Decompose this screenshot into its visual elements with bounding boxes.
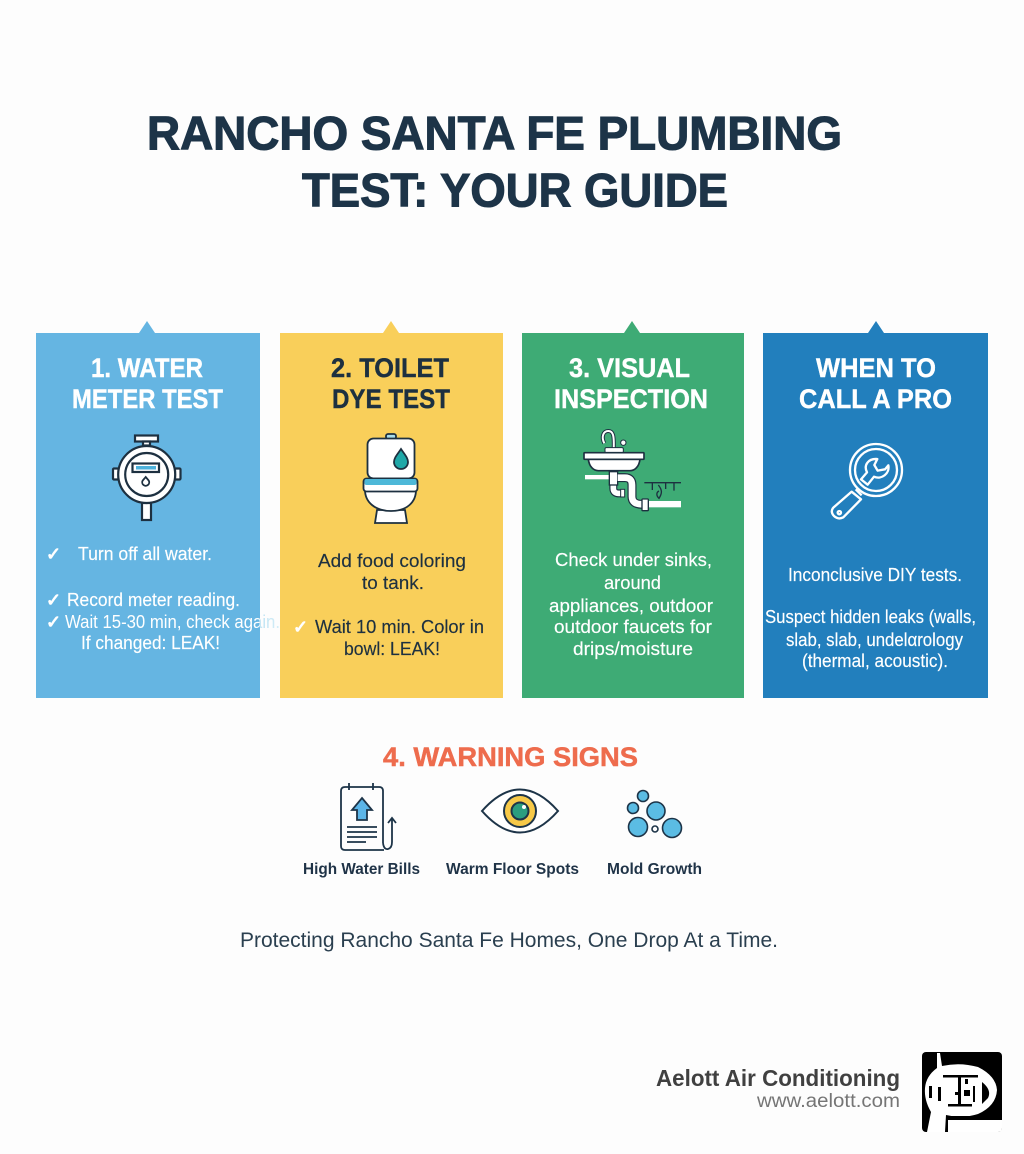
text: dye test steps: Add food coloring	[318, 551, 466, 571]
company name and website: Aelott Air Conditioning	[656, 1065, 900, 1091]
warning sign: warm floor spots	[446, 790, 579, 878]
text: meter steps: ✓	[46, 590, 61, 611]
text: when to call reasons: Inconclusive DIY tests.	[788, 565, 962, 585]
icon: water meter	[113, 436, 180, 520]
text: inspection instructions: drips/moisture	[573, 639, 693, 659]
label: high water bills: High Water Bills	[303, 861, 420, 878]
heading: warning signs: 4. WARNING SIGNS	[383, 742, 638, 772]
heading: visual inspection	[554, 353, 708, 414]
icon: rising bill	[341, 783, 396, 850]
heading: water meter test	[72, 353, 223, 414]
text: dye test steps: to tank.	[362, 573, 424, 593]
text: meter steps: If changed: LEAK!	[81, 633, 220, 653]
text: meter steps: ✓	[46, 612, 61, 633]
icon: mold bubbles	[628, 790, 682, 838]
text: meter steps: Wait 15-30 min, check again.	[65, 612, 280, 632]
text: meter steps	[46, 544, 280, 653]
text: when to call reasons: Suspect hidden leaks (walls,	[765, 607, 976, 627]
text: when to call reasons	[765, 565, 976, 671]
icon: sink and pipes	[584, 431, 681, 511]
panel: toilet dye test	[280, 321, 503, 698]
text: dye test steps	[293, 551, 484, 659]
icon: magnifier with wrench	[832, 444, 902, 518]
heading: water meter test: METER TEST	[72, 384, 223, 414]
warning sign: mold growth	[607, 790, 702, 878]
text: dye test steps: bowl: LEAK!	[344, 639, 440, 659]
heading: when to call a pro: CALL A PRO	[799, 384, 952, 414]
label: warm floor spots: Warm Floor Spots	[446, 861, 579, 878]
heading: toilet dye test	[331, 353, 450, 414]
title	[147, 106, 842, 216]
text: dye test steps: Wait 10 min. Color in	[315, 617, 484, 637]
heading: water meter test: 1. WATER	[91, 353, 203, 383]
text: meter steps: Record meter reading.	[67, 590, 240, 610]
text: inspection instructions	[549, 550, 713, 659]
text: meter steps: Turn off all water.	[78, 544, 212, 564]
logo: aelott emblem	[922, 1052, 1002, 1132]
panel: when to call a pro	[763, 321, 988, 698]
heading: when to call a pro	[799, 353, 952, 414]
label: mold growth: Mold Growth	[607, 861, 702, 878]
warning sign: high water bills	[303, 783, 420, 878]
icon: eye	[482, 790, 558, 832]
text: inspection instructions: appliances, outdoor	[549, 596, 713, 616]
heading: visual inspection: 3. VISUAL	[569, 353, 690, 383]
text: inspection instructions: Check under sinks,	[555, 550, 712, 570]
title: RANCHO SANTA FE PLUMBING	[147, 106, 842, 160]
heading: toilet dye test: 2. TOILET	[331, 353, 449, 383]
text: meter steps: ✓	[46, 544, 61, 565]
panel: water meter test	[36, 321, 280, 698]
text: when to call reasons: (thermal, acoustic).	[802, 651, 948, 671]
heading: when to call a pro: WHEN TO	[816, 353, 936, 383]
heading: visual inspection: INSPECTION	[554, 384, 708, 414]
text: inspection instructions: outdoor faucets for	[554, 617, 712, 637]
text: when to call reasons: slab, slab, undelαrology	[786, 630, 963, 650]
panel: visual inspection	[522, 321, 744, 698]
tagline: Protecting Rancho Santa Fe Homes, One Drop At a Time.	[240, 929, 778, 952]
text: dye test steps: ✓	[293, 617, 308, 638]
icon: toilet	[364, 434, 418, 523]
text: inspection instructions: around	[604, 573, 661, 593]
company name and website	[656, 1065, 900, 1112]
heading: toilet dye test: DYE TEST	[332, 384, 450, 414]
company name and website: www.aelott.com	[756, 1091, 900, 1112]
title: TEST: YOUR GUIDE	[302, 164, 728, 216]
